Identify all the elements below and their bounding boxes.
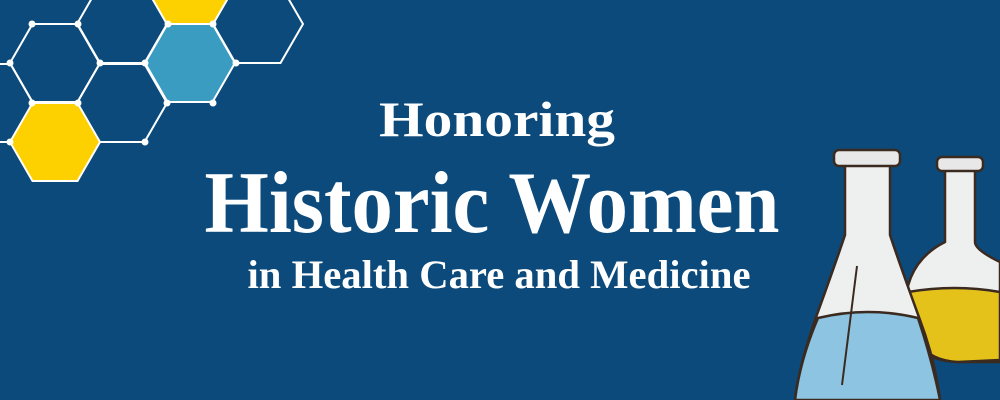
title: Honoring <box>379 91 615 147</box>
icon: yellow round flask <box>905 157 1000 362</box>
title: in Health Care and Medicine <box>248 252 750 297</box>
hexagon network <box>0 0 303 181</box>
title: Historic Women <box>204 155 780 252</box>
icon: blue erlenmeyer flask <box>795 150 940 400</box>
title <box>204 91 780 297</box>
